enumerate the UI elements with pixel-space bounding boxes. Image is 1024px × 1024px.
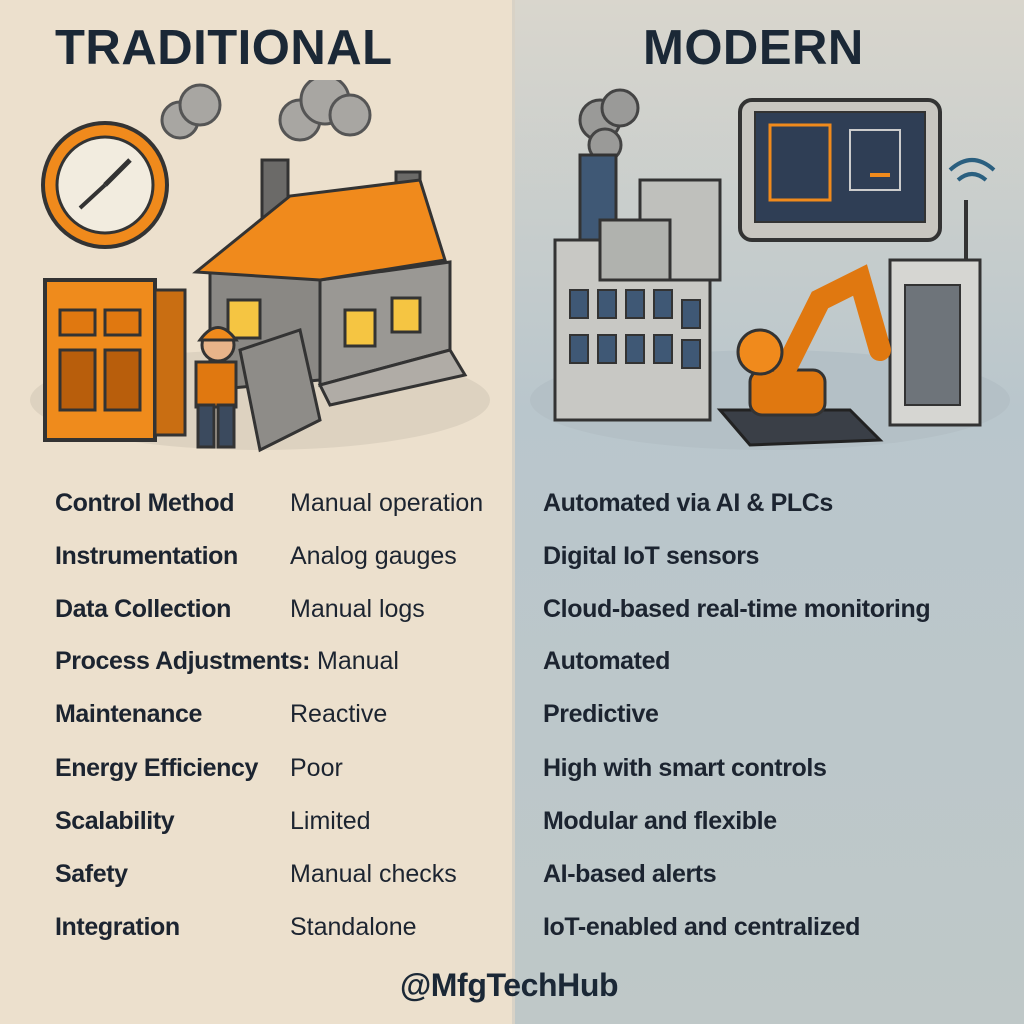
table: left column labels and values: Poor	[290, 754, 343, 782]
table: left column labels and values: Limited	[290, 807, 371, 835]
table: left column labels and values: Manual checks	[290, 860, 457, 888]
title: traditional: TRADITIONAL	[55, 21, 393, 75]
table: right column modern values: IoT-enabled and centralized	[543, 913, 860, 941]
table: right column modern values: Automated via AI & PLCs	[543, 489, 833, 517]
table: left column labels and values: Instrumentation	[55, 542, 238, 570]
table: right column modern values: Predictive	[543, 700, 659, 728]
table: left column labels and values: Manual logs	[290, 595, 425, 623]
illustration: traditional factory	[30, 80, 490, 452]
illustration: modern factory	[554, 88, 996, 446]
table: left column labels and values: Maintenance	[55, 700, 202, 728]
table: right column modern values: Cloud-based real-time monitoring	[543, 595, 930, 623]
table: right column modern values	[543, 489, 930, 941]
table: left column labels and values: Data Collection	[55, 595, 231, 623]
table: right column modern values: Digital IoT sensors	[543, 542, 759, 570]
table: left column labels and values: Control Method	[55, 489, 234, 517]
table: left column labels and values: Standalone	[290, 913, 417, 941]
table: right column modern values: AI-based alerts	[543, 860, 716, 888]
table: left column labels and values: Process Adjustments: Manual	[55, 647, 399, 675]
table: left column labels and values: Analog gauges	[290, 542, 457, 570]
table: left column labels and values: Manual operation	[290, 489, 483, 517]
table: right column modern values: High with smart controls	[543, 754, 826, 782]
table: right column modern values: Modular and flexible	[543, 807, 777, 835]
table: left column labels and values: Reactive	[290, 700, 387, 728]
table: left column labels and values: Energy Efficiency	[55, 754, 258, 782]
table: left column labels and values: Scalability	[55, 807, 174, 835]
table: left column labels and values: Integration	[55, 913, 180, 941]
table: left column labels and values: Safety	[55, 860, 128, 888]
title: modern: MODERN	[643, 21, 864, 75]
watermark: @MfgTechHub	[400, 967, 618, 1003]
table: left column labels and values	[55, 489, 483, 941]
table: right column modern values: Automated	[543, 647, 670, 675]
